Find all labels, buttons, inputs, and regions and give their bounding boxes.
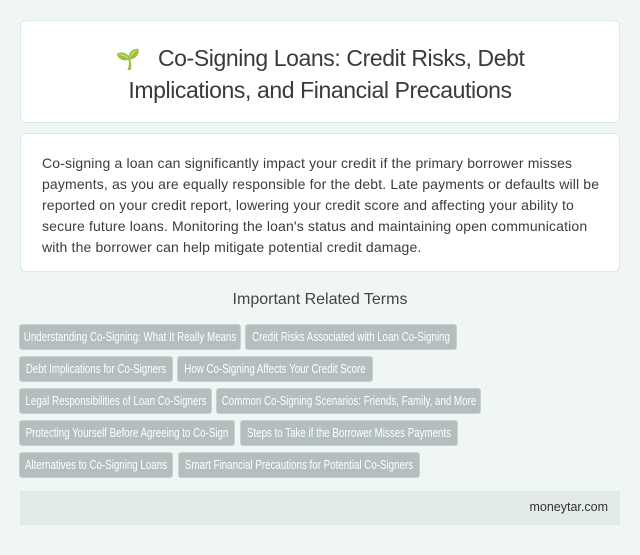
tag 6: Common Co-Signing Scenarios: Friends, Family, and More	[221, 394, 476, 408]
tag 1: Understanding Co-Signing: What It Really Means	[24, 330, 236, 344]
title: Implications, and Financial Precautions	[128, 77, 512, 103]
tag 2	[246, 325, 456, 349]
text card	[20, 133, 620, 272]
footer	[20, 491, 620, 525]
paragraph: reported on your credit report, lowering your credit score and affecting your ability to	[42, 197, 574, 213]
tag 3: Debt Implications for Co-Signers	[26, 362, 166, 376]
heading: related terms: Important Related Terms	[233, 291, 407, 308]
tag 3	[20, 357, 172, 381]
paragraph: Co-signing a loan can significantly impact your credit if the primary borrower misses	[42, 155, 572, 171]
title	[115, 45, 525, 103]
tag 1	[20, 325, 240, 349]
tag 4: How Co-Signing Affects Your Credit Score	[184, 362, 366, 376]
tag 4	[178, 357, 372, 381]
tag 10	[179, 453, 419, 477]
tag 5: Legal Responsibilities of Loan Co-Signers	[25, 394, 206, 408]
tag 6	[217, 389, 480, 413]
tag 9: Alternatives to Co-Signing Loans	[25, 458, 167, 472]
tag 8: Steps to Take if the Borrower Misses Payments	[247, 426, 451, 440]
tag 10: Smart Financial Precautions for Potential Co-Signers	[185, 458, 413, 472]
paragraph: secure future loans. Monitoring the loan's status and maintaining open communication	[42, 218, 587, 234]
paragraph: payments, as you are equally responsible for the debt. Late payments or defaults will be	[42, 176, 599, 192]
footer credit: moneytar.com	[529, 500, 608, 514]
tag 7: Protecting Yourself Before Agreeing to Co-Sign	[26, 426, 228, 440]
title: 🌱 Co-Signing Loans: Credit Risks, Debt	[115, 45, 525, 71]
title card	[20, 20, 620, 123]
tag 7	[20, 421, 234, 445]
tag 8	[241, 421, 457, 445]
tag 5	[20, 389, 211, 413]
paragraph	[42, 155, 599, 255]
paragraph: with the borrower can help mitigate potential credit damage.	[42, 239, 421, 255]
tag 2: Credit Risks Associated with Loan Co-Signing	[252, 330, 450, 344]
tag 9	[20, 453, 172, 477]
